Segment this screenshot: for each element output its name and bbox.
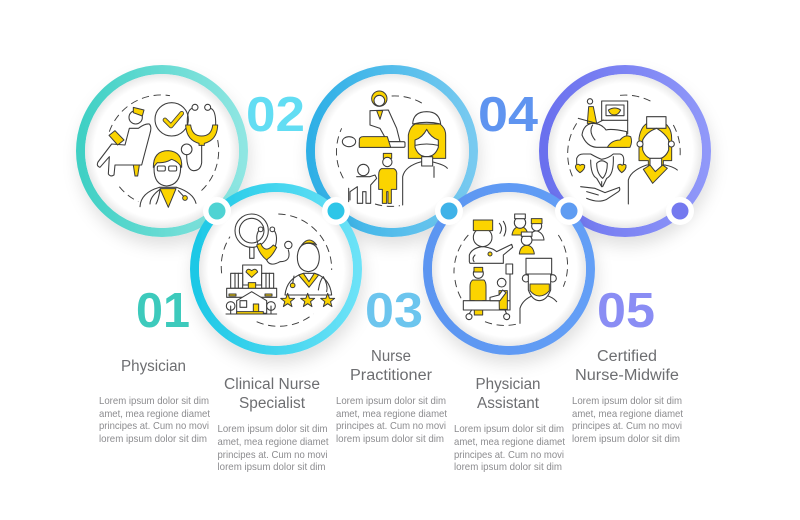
heading: Certified Nurse-Midwife [575,348,679,384]
heading: Nurse Practitioner: Nurse [371,348,411,365]
text block: Certified Nurse-Midwife description: Lorem ipsum dolor sit dim [572,396,682,407]
text block: Certified Nurse-Midwife description: lorem ipsum dolor sit dim [572,434,680,445]
connector dot 2 [322,197,350,225]
text block: Nurse Practitioner description [336,396,447,445]
heading: Physician Assistant [476,376,540,412]
text block: Physician Assistant description: amet, mea regione diamet [454,437,565,448]
text block: Nurse Practitioner description: amet, mea regione diamet [336,409,447,420]
connector dot 4 [555,197,583,225]
text block: Clinical Nurse Specialist description [218,424,329,473]
icon: physician [97,95,219,207]
panel: circle 3 ring [310,70,474,232]
number 01: 01 [136,284,190,338]
text block: Certified Nurse-Midwife description: amet, mea regione diamet [572,409,683,420]
text block: Nurse Practitioner description: lorem ipsum dolor sit dim [336,434,444,445]
text block: Physician Assistant description [454,424,565,473]
panel: circle 5 ring [544,70,706,232]
heading: Physician: Physician [121,358,186,375]
panel: circle 4 ring [428,188,590,350]
connector dot 1 [203,197,231,225]
heading: Physician Assistant: Physician [476,376,540,393]
heading: Nurse Practitioner [350,348,432,384]
heading: Clinical Nurse Specialist: Specialist [239,395,306,412]
text block: Clinical Nurse Specialist description: lorem ipsum dolor sit dim [218,462,326,473]
text block: Certified Nurse-Midwife description: principes at. Cum no movi [572,421,682,432]
icon: certified nurse-midwife [568,95,680,204]
heading: Certified Nurse-Midwife: Certified [597,348,657,365]
text block: Physician description: amet, mea regione diamet [99,409,210,420]
heading: Physician Assistant: Assistant [477,395,540,412]
text block: Physician description: principes at. Cum no movi [99,421,209,432]
text block: Physician description: lorem ipsum dolor sit dim [99,434,207,445]
panel: circle 1 ring [80,70,244,232]
icon: clinical nurse specialist [221,214,335,326]
text block: Nurse Practitioner description: Lorem ipsum dolor sit dim [336,396,446,407]
text block: Physician description [99,396,210,445]
connector dot 3 [435,197,463,225]
text block: Physician description: Lorem ipsum dolor sit dim [99,396,209,407]
number 03: 03 [365,284,423,338]
heading: Nurse Practitioner: Practitioner [350,367,432,384]
text block: Nurse Practitioner description: principes at. Cum no movi [336,421,446,432]
heading: Clinical Nurse Specialist: Clinical Nurse [224,376,320,393]
connector dot 5 [666,197,694,225]
heading: Certified Nurse-Midwife: Nurse-Midwife [575,367,679,384]
number 05: 05 [597,284,655,338]
heading: Clinical Nurse Specialist [224,376,320,412]
text block: Clinical Nurse Specialist description: Lorem ipsum dolor sit dim [218,424,328,435]
text block: Clinical Nurse Specialist description: principes at. Cum no movi [218,450,328,461]
text block: Certified Nurse-Midwife description [572,396,683,445]
icon: physician assistant [454,214,568,325]
icon: nurse practitioner [336,91,447,206]
number 02: 02 [246,88,305,142]
text block: Physician Assistant description: principes at. Cum no movi [454,450,564,461]
text block: Physician Assistant description: Lorem ipsum dolor sit dim [454,424,564,435]
number 04: 04 [478,88,538,142]
text block: Physician Assistant description: lorem ipsum dolor sit dim [454,462,562,473]
panel: circle 2 ring [194,188,358,350]
text block: Clinical Nurse Specialist description: amet, mea regione diamet [218,437,329,448]
